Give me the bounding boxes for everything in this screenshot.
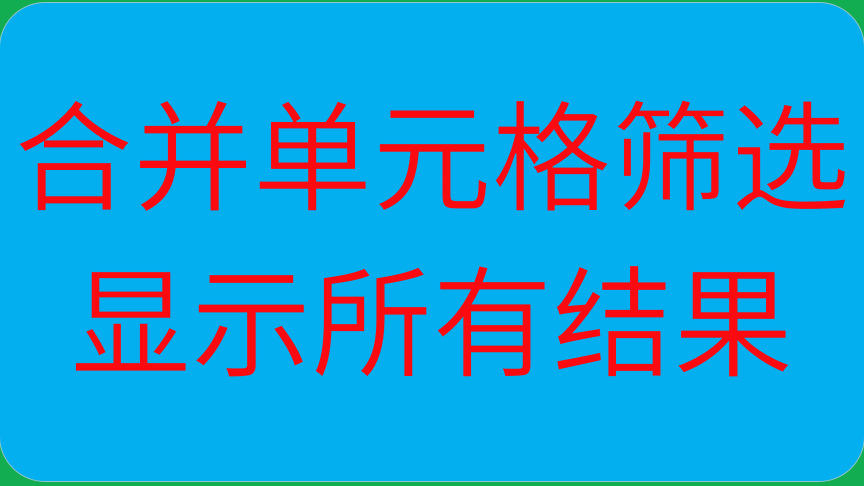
title: first line: 合并单元格筛选 <box>14 94 850 227</box>
title: second line: 显示所有结果 <box>70 258 794 393</box>
